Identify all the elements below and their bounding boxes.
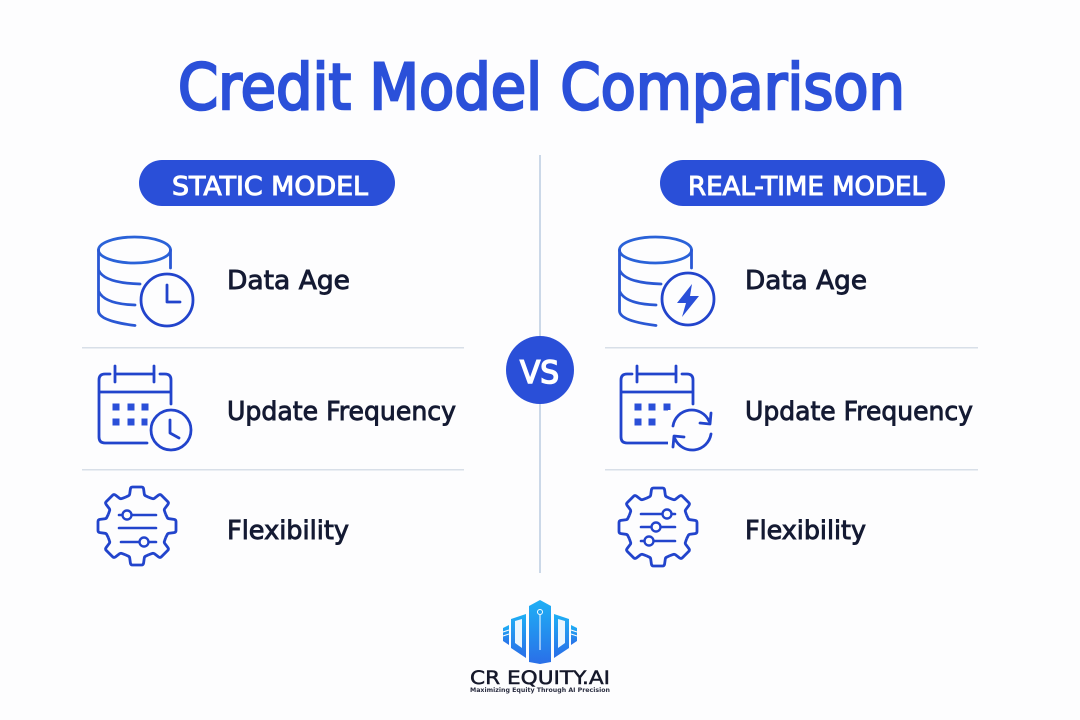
logo: cr equity.ai bbox=[470, 600, 610, 694]
title: Credit Model Comparison bbox=[178, 51, 905, 124]
static model pill: STATIC MODEL bbox=[172, 172, 369, 202]
icon: database with lightning bbox=[620, 237, 714, 326]
row divider bbox=[605, 469, 978, 470]
row divider bbox=[82, 469, 464, 470]
panel: real-time model bbox=[605, 160, 978, 566]
vs badge: VS bbox=[520, 355, 559, 391]
icon: gear with sliders bbox=[619, 488, 697, 566]
row divider bbox=[82, 347, 464, 348]
center divider bbox=[539, 155, 541, 573]
label: flexibility: Flexibility bbox=[227, 516, 349, 546]
label: data age: Data Age bbox=[227, 266, 350, 296]
real-time model pill: REAL-TIME MODEL bbox=[688, 172, 927, 202]
row divider bbox=[605, 347, 978, 348]
real-time model pill bbox=[660, 160, 945, 206]
icon: calendar with sync arrows bbox=[621, 366, 714, 454]
panel: static model bbox=[82, 160, 464, 565]
tagline: Maximizing Equity Through AI Precision bbox=[470, 686, 610, 694]
static model pill bbox=[139, 160, 395, 206]
icon: gear with sliders bbox=[98, 487, 176, 565]
wordmark: CR EQUITY.AI bbox=[470, 667, 610, 689]
vs badge bbox=[506, 336, 574, 404]
icon: database with clock bbox=[98, 237, 193, 326]
label: data age: Data Age bbox=[745, 266, 867, 296]
icon: calendar with clock bbox=[99, 366, 191, 450]
label: flexibility: Flexibility bbox=[745, 516, 866, 546]
label: update frequency: Update Frequency bbox=[227, 397, 456, 427]
icon: building bbox=[503, 600, 577, 664]
label: update frequency: Update Frequency bbox=[745, 397, 973, 427]
